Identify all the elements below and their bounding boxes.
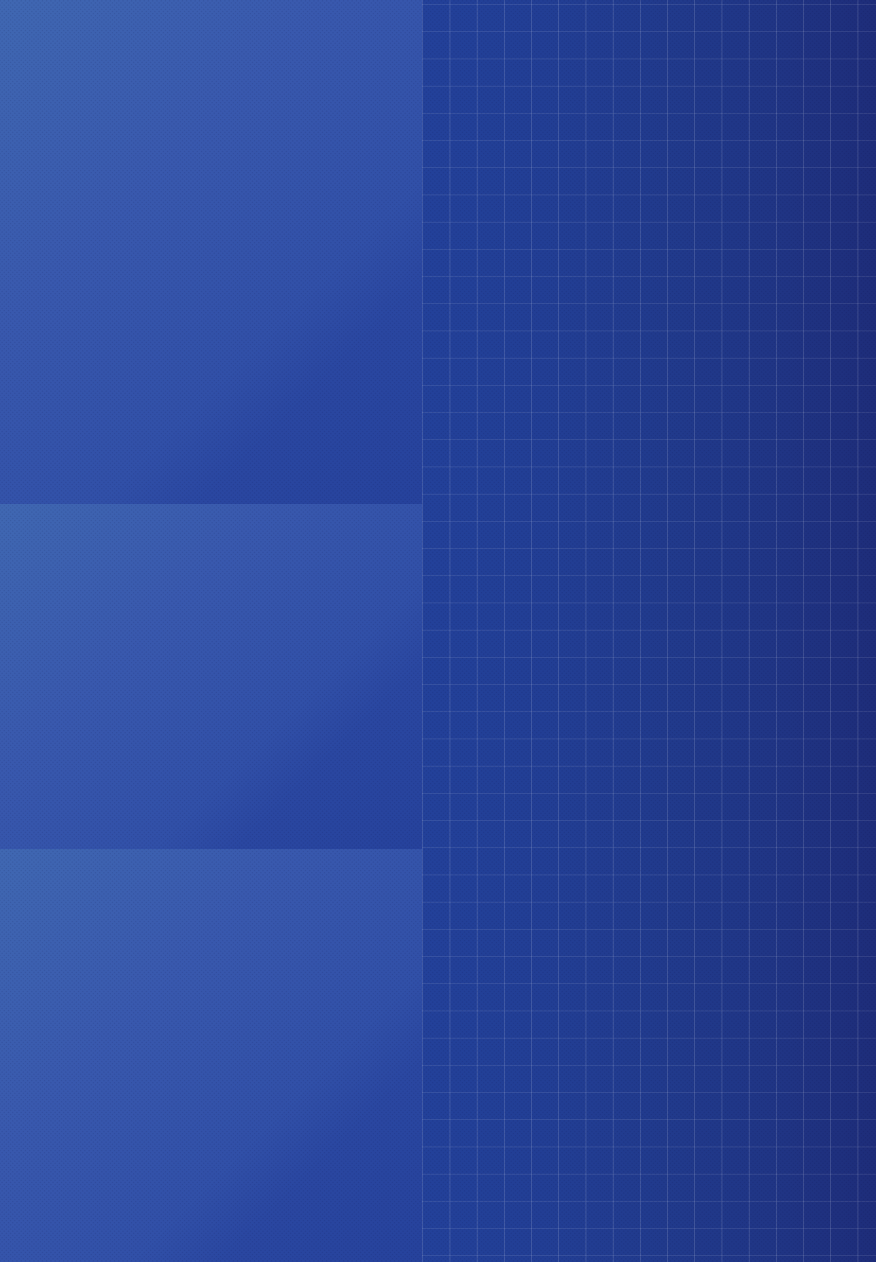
panel: middle left gradient <box>0 504 422 849</box>
panel: right grid <box>422 0 876 1262</box>
panel: top left gradient <box>0 0 422 504</box>
panel: bottom left gradient <box>0 849 422 1262</box>
